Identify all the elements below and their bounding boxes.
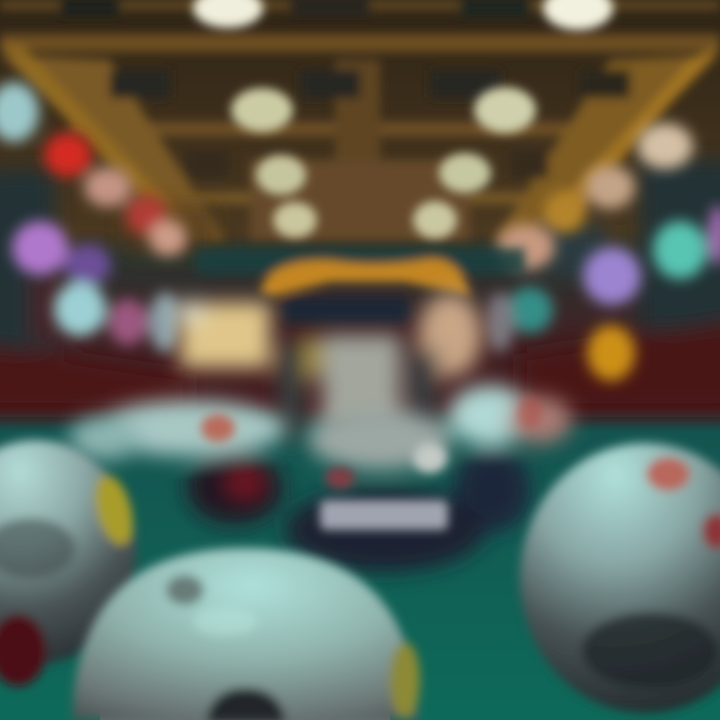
right ball	[520, 443, 720, 713]
mid-ground tables	[69, 385, 572, 572]
left wall: dark band and maroon stalls	[0, 170, 215, 410]
ceiling lights	[193, 0, 613, 239]
left ball	[0, 440, 140, 686]
right wall: dark band and maroon stalls	[520, 160, 720, 410]
right lanterns	[486, 123, 720, 381]
central table top	[201, 396, 542, 530]
central gate: teal band, orange arch and dark bar	[195, 248, 525, 323]
bottom ball base strip	[100, 706, 390, 720]
ceiling beams	[0, 0, 720, 240]
left lanterns	[0, 82, 187, 352]
bottom centre ball	[72, 548, 420, 720]
central aisle and bright panels	[174, 293, 482, 440]
